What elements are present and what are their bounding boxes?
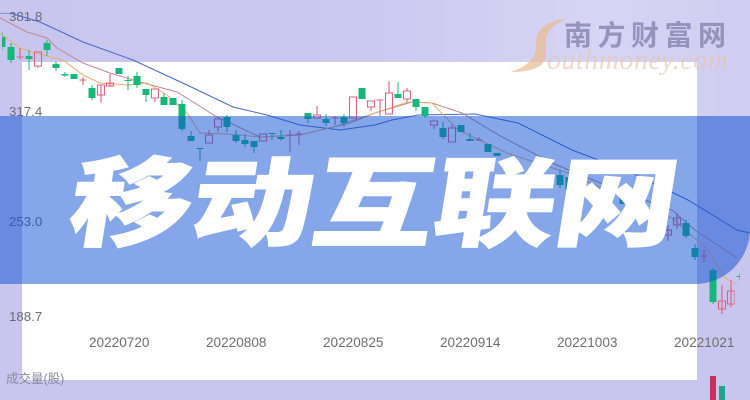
date axis labels: 20220720 [89, 335, 150, 350]
white chart panel [22, 62, 697, 380]
price axis labels: 317.4 [9, 104, 42, 119]
moving average lines [0, 13, 750, 285]
logo domain: outhmoney.com [547, 45, 728, 76]
price axis labels [9, 9, 42, 324]
price axis labels: 188.7 [9, 309, 42, 324]
date axis labels: 20220914 [440, 335, 501, 350]
candlesticks: green [2, 32, 740, 304]
date axis labels: 20220825 [323, 335, 383, 350]
volume label: 成交量(股) [6, 371, 64, 386]
price axis labels: 381.8 [9, 9, 42, 24]
date axis labels: 20220808 [206, 335, 266, 350]
candlesticks: red [16, 48, 734, 314]
date axis labels: 20221021 [674, 335, 734, 350]
logo swoosh [510, 19, 567, 72]
blue translucent title band [0, 116, 750, 284]
watermark logo: southmoney [510, 14, 732, 76]
date axis labels: 20221003 [557, 335, 617, 350]
date axis labels [89, 335, 734, 350]
logo chinese name: 南方财富网 [564, 14, 732, 54]
title: 移动互联网 [62, 125, 690, 266]
volume bars [710, 376, 725, 400]
price axis labels: 253.0 [9, 214, 42, 229]
